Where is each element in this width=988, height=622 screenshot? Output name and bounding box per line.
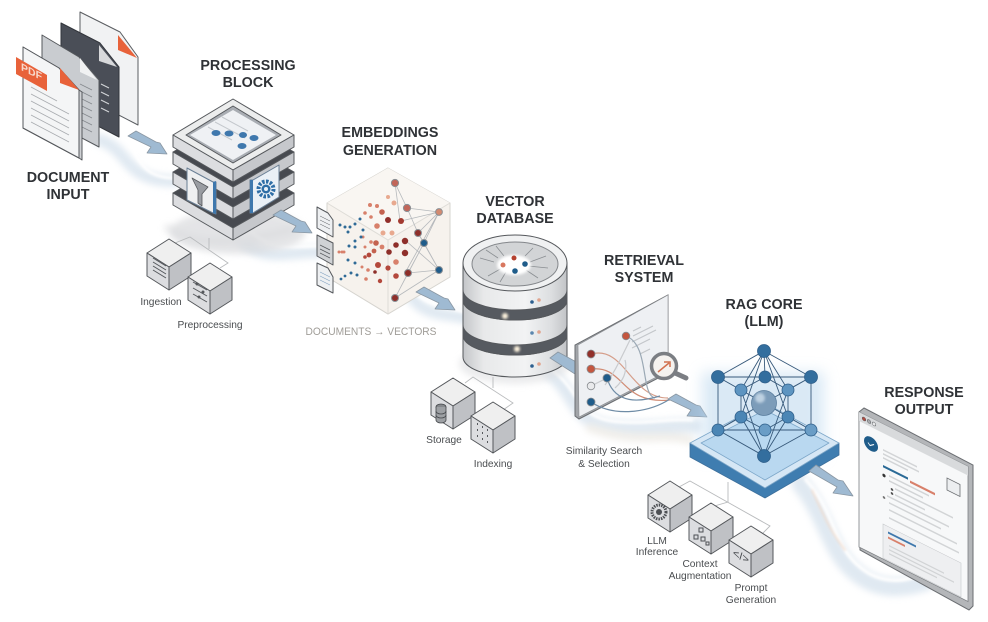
network nodes: [712, 344, 818, 462]
label: preprocessing: Preprocessing: [177, 320, 243, 331]
panel: response window: [859, 408, 973, 610]
heading: embeddings generation: GENERATION: [343, 143, 437, 159]
icon: magnifier: [652, 354, 686, 378]
cube: storage: [431, 378, 475, 429]
heading: vector database: DATABASE: [476, 211, 554, 227]
cube: indexing: [471, 402, 515, 453]
icons: three source documents: [317, 207, 333, 293]
heading: processing block: BLOCK: [223, 75, 274, 91]
panel: processing block: [170, 99, 306, 254]
cube: LLM inference: [648, 481, 692, 532]
retrieval dots: [587, 332, 630, 406]
panel: vector database cylinder: [459, 235, 571, 384]
cube: prompt generation: </>: [733, 547, 749, 567]
label: prompt generation: [726, 583, 776, 606]
label: similarity search and selection: [566, 446, 642, 470]
panel: document input: [16, 12, 138, 160]
heading: retrieval system: RETRIEVAL: [604, 253, 684, 269]
label: context augmentation: Context: [682, 559, 718, 570]
vector point cloud: [338, 195, 408, 283]
large vector nodes: [391, 179, 442, 302]
heading: embeddings generation: [342, 125, 438, 159]
heading: processing block: PROCESSING: [200, 58, 296, 74]
heading: retrieval system: [604, 253, 684, 286]
heading: document input: DOCUMENT: [27, 170, 110, 186]
heading: RAG core: (LLM): [745, 314, 784, 330]
stub arrow: database to retrieval: [550, 352, 580, 376]
text lines: [632, 326, 656, 354]
connector: RAG sub-steps: [679, 481, 770, 533]
icon: gray document: [42, 35, 99, 147]
label: prompt generation: Prompt: [735, 583, 768, 594]
icon: process nodes: [208, 117, 258, 149]
panel: embeddings cube: [327, 168, 450, 314]
label: ingestion: Ingestion: [140, 297, 182, 308]
arrow: RAG core to response: [809, 465, 853, 496]
label: documents to vectors: DOCUMENTS → VECTORS: [306, 326, 436, 338]
arrow: retrieval to RAG core: [668, 394, 707, 417]
connector: processing sub-steps: [175, 237, 228, 268]
cube: preprocessing: [188, 263, 232, 314]
similarity curves: [591, 336, 670, 412]
circuit traces: [480, 246, 548, 282]
icon: gear panel: [250, 165, 279, 213]
heading: vector database: VECTOR: [485, 194, 545, 210]
icon: white document, back: [80, 12, 138, 125]
network lines: [395, 183, 439, 298]
label: similarity search and selection: & Selection: [578, 459, 630, 470]
flow ribbons between stages: [100, 128, 925, 587]
label: LLM inference: Inference: [636, 547, 679, 558]
label: context augmentation: Augmentation: [669, 571, 731, 582]
cube: context augmentation: [689, 503, 733, 554]
heading: RAG core: [725, 297, 803, 330]
label: context augmentation: [669, 559, 731, 582]
cube: ingestion: [147, 239, 191, 290]
heading: embeddings generation: EMBEDDINGS: [342, 125, 438, 141]
icon: chat bubble: [947, 478, 960, 496]
data dots: [500, 256, 541, 368]
icon: PDF document, front: PDF: [21, 62, 42, 83]
heading: response output: [884, 385, 964, 418]
heading: document input: [27, 170, 110, 203]
label: storage: Storage: [426, 435, 462, 446]
heading: retrieval system: SYSTEM: [615, 270, 673, 286]
arrow: embeddings to database: [416, 287, 455, 310]
cube: prompt generation: [729, 526, 773, 577]
icon: filter panel: [187, 168, 216, 214]
heading: processing block: [200, 58, 296, 91]
callout box: [883, 524, 961, 597]
arrow: processing to embeddings: [273, 210, 312, 233]
network edges: [718, 351, 811, 456]
arrow: documents to processing: [128, 131, 167, 154]
label: prompt generation: Generation: [726, 595, 776, 606]
heading: response output: OUTPUT: [895, 402, 954, 418]
connector: database sub-steps: [465, 377, 513, 410]
platform: [690, 403, 839, 498]
response lines: [883, 449, 959, 554]
icon: PDF document, front: [16, 47, 82, 160]
panel: RAG core: [690, 344, 839, 498]
panel: retrieval screen: [575, 295, 670, 419]
label: LLM inference: LLM: [647, 536, 667, 547]
heading: response output: RESPONSE: [884, 385, 964, 401]
label: similarity search and selection: Similarity Search: [566, 446, 642, 457]
icon: check badge: [864, 434, 878, 454]
heading: document input: INPUT: [47, 187, 90, 203]
label: LLM inference: [636, 536, 679, 558]
heading: RAG core: RAG CORE: [725, 297, 803, 313]
heading: vector database: [476, 194, 554, 227]
label: indexing: Indexing: [474, 459, 513, 470]
icon: dark document: [61, 23, 119, 137]
